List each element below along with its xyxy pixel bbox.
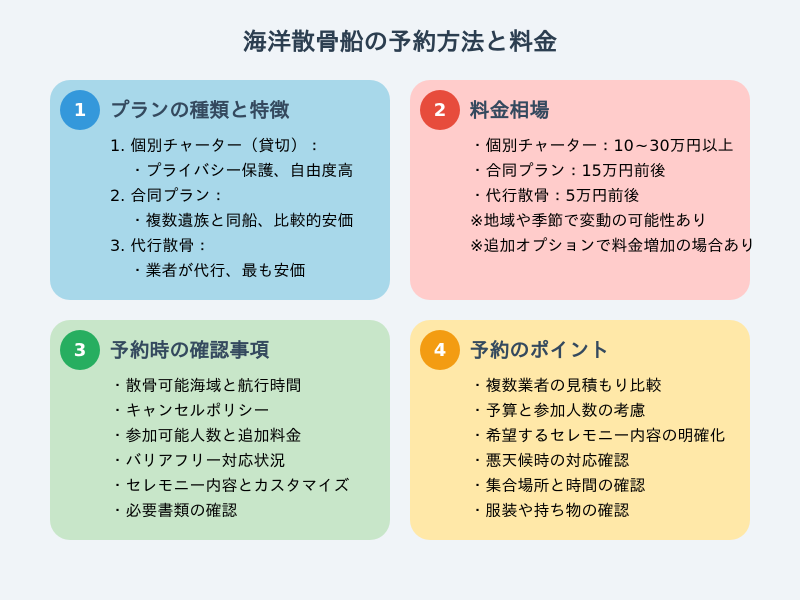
text block: price list: ・合同プラン：15万円前後 [470,161,666,180]
heading: price range: 料金相場 [470,98,550,122]
heading: items to confirm: 予約時の確認事項 [110,338,270,362]
icon: number 3 [60,330,100,370]
text block: price list [470,136,755,255]
text block: confirm list: ・バリアフリー対応状況 [110,451,286,470]
text block: points list: ・複数業者の見積もり比較 [470,376,662,395]
text block: confirm list: ・セレモニー内容とカスタマイズ [110,476,350,495]
text block: points list: ・服装や持ち物の確認 [470,501,630,520]
text block: confirm list: ・キャンセルポリシー [110,401,270,420]
text block: plan list: ・プライバシー保護、自由度高 [130,161,354,180]
text block: points list: ・予算と参加人数の考慮 [470,401,646,420]
text block: points list: ・悪天候時の対応確認 [470,451,630,470]
text block: confirm list: ・散骨可能海域と航行時間 [110,376,302,395]
icon: number 3: 3 [74,340,86,361]
text block: plan list: ・業者が代行、最も安価 [130,261,306,280]
text block: plan list: 2. 合同プラン： [110,186,226,205]
icon: number 4: 4 [434,340,446,361]
icon: number 1: 1 [74,100,86,121]
icon: number 4 [420,330,460,370]
text block: plan list [110,136,354,280]
icon: number 2 [420,90,460,130]
text block: plan list: 1. 個別チャーター（貸切）： [110,136,322,155]
text block: confirm list: ・必要書類の確認 [110,501,238,520]
text block: price list: ・代行散骨：5万円前後 [470,186,640,205]
icon: number 2: 2 [434,100,446,121]
heading: booking points: 予約のポイント [470,338,610,362]
title: 海洋散骨船の予約方法と料金 [243,28,557,56]
panel: plan types [50,80,390,300]
panel: booking points [410,320,750,540]
text block: price list: ・個別チャーター：10~30万円以上 [470,136,734,155]
text block: points list: ・希望するセレモニー内容の明確化 [470,426,726,445]
heading: plan types: プランの種類と特徴 [110,98,290,122]
text block: plan list: ・複数遺族と同船、比較的安価 [130,211,354,230]
text block: price list: ※地域や季節で変動の可能性あり [470,211,707,230]
text block: confirm list [110,376,350,520]
panel: items to confirm [50,320,390,540]
text block: points list: ・集合場所と時間の確認 [470,476,646,495]
text block: confirm list: ・参加可能人数と追加料金 [110,426,302,445]
text block: plan list: 3. 代行散骨： [110,236,210,255]
text block: price list: ※追加オプションで料金増加の場合あり [470,236,755,255]
panel: price range [410,80,755,300]
icon: number 1 [60,90,100,130]
text block: points list [470,376,726,520]
